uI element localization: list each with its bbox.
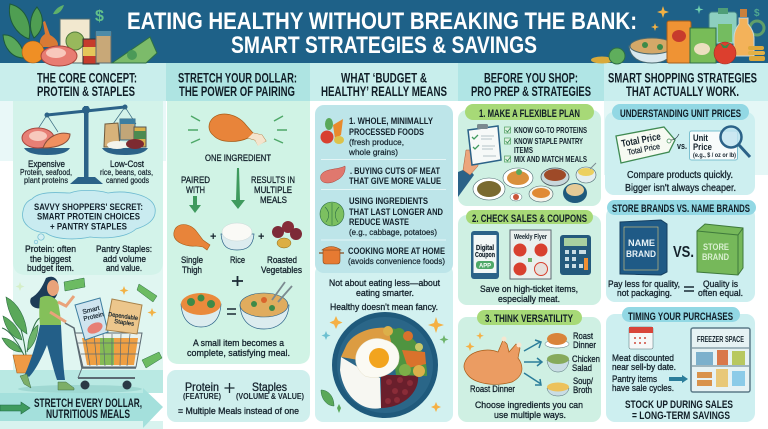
panel: make a flexible plan: 1. MAKE A FLEXIBLE PLAN [479,108,580,120]
panel: what budget and healthy means [315,105,453,273]
icon: unit price card with magnifier [690,126,750,160]
results in multiple meals: RESULTS IN [251,175,295,186]
results in multiple meals: MULTIPLE [254,185,292,196]
panel: timing your purchases [606,307,755,422]
checklist: ITEMS [514,145,533,155]
header illustration: left groceries: $ [95,8,104,25]
scale labels: canned goods [106,176,149,185]
item 3 cabbage [320,196,443,237]
paired with: WITH [186,185,205,196]
icon: unit price card with magnifier: Price [693,142,712,153]
column headings: PRO PREP & STRATEGIES [471,84,591,99]
timing notes: near sell-by date. [612,362,676,373]
protein and staples notes [25,244,152,274]
text: not about eating less [329,278,440,313]
pairing labels: Rice [230,255,245,266]
column headings: THE CORE CONCEPT: [37,70,137,86]
paired with [181,175,210,213]
icon: unit price card with magnifier: Unit [693,133,709,144]
checklist: MIX AND MATCH MEALS [514,154,587,164]
scale labels: rice, beans, oats, [100,168,153,177]
panel: make a flexible plan [458,104,601,206]
timing notes: Pantry items [612,374,657,385]
column headings: WHAT ‘BUDGET & [341,70,427,86]
panel: protein plus staples formula: (FEATURE) [183,392,221,401]
item 4 pot: COOKING MORE AT HOME [348,246,445,257]
text: not about eating less: Not about eating less—about [329,278,440,289]
vs: vs. [677,141,687,152]
item 2 cuts of meat [321,166,441,187]
pairing labels: Roasted [267,255,297,266]
item 1 whole foods: PROCESSED FOODS [349,127,424,138]
item 4 pot: (avoids convenience foods) [348,257,445,266]
pairing labels: Single [181,255,203,266]
title: SMART STRATEGIES & SAVINGS [231,32,537,59]
item 1 whole foods: 1. WHOLE, MINIMALLY [349,116,434,127]
panel: check sales and coupons [458,210,601,305]
icon: store brand box: STORE [703,242,729,253]
panel: understanding unit prices [605,104,755,195]
icon: balance scale [22,104,148,184]
icon: woman shopping with cart: Smart [82,305,100,316]
scale labels: Low-Cost [110,159,144,170]
caption: use multiple ways. [494,410,566,421]
icon: potted plant [2,297,40,373]
column headings: THE POWER OF PAIRING [179,84,295,99]
header illustration: left groceries [3,4,157,66]
timing notes: Meat discounted [612,353,674,364]
icon: clipboard in hand [458,124,501,197]
equation: bowls [181,282,292,329]
arrow: down [231,168,245,209]
caption: Save on high-ticket items, [480,284,578,295]
header illustration: right groceries [591,5,765,64]
item 4 pot [319,246,445,266]
pairing row: + [258,231,264,243]
dish labels: Dinner [573,340,596,351]
timing notes [612,353,676,394]
item 3 cabbage: (e.g., cabbage, potatoes) [349,228,437,237]
protein and staples notes: Protein: often [25,244,76,255]
vs label: VS. [673,244,694,261]
icon: chicken drumstick [188,114,287,146]
item 1 whole foods: (fresh produce, [349,138,404,147]
pairing labels: Thigh [182,265,202,276]
icon: store brand box [697,224,743,275]
icon: weekly flyer: Weekly Flyer [514,232,547,241]
item 3 cabbage: THAT LAST LONGER AND [349,207,443,218]
icon: store brand box: BRAND [702,252,729,263]
text: not about eating less: eating smarter. [356,288,414,299]
dish labels: Broth [573,385,592,396]
caption: A small item becomes a [193,338,285,349]
icons: flying dollar bills and sparkles [15,278,162,368]
icon: name brand box [620,220,667,275]
icon: roast chicken [464,332,522,384]
column headings: HEALTHY’ REALLY MEANS [321,84,447,99]
caption: Choose ingredients you can [475,400,583,411]
icon: phone with digital coupon: Digital [476,245,494,252]
icon: woman shopping with cart: Protein [83,311,105,323]
caption: often equal. [698,288,743,299]
item 1 whole foods [320,116,434,157]
meal dishes [473,163,596,203]
icon: phone with digital coupon: Coupon [475,252,495,259]
item 1 whole foods: whole grains) [348,148,398,157]
caption: especially meat. [498,294,560,305]
pairing row: + [210,231,216,243]
item 3 cabbage: USING INGREDIENTS [349,196,428,207]
panel: protein plus staples formula [167,370,310,422]
title: EATING HEALTHY WITHOUT BREAKING THE BANK: [127,8,637,35]
versatile dishes [545,333,569,396]
icon: rice bowl plate with egg [321,312,448,418]
icon: calendar [629,327,653,349]
dish labels: Salad [572,363,592,374]
item 2 cuts of meat: THAT GIVE MORE VALUE [349,176,441,187]
checklist: KNOW STAPLE PANTRY [514,136,583,146]
column headings: PROTEIN & STAPLES [37,84,135,99]
dish labels [572,331,600,396]
header illustration: right groceries: $ [754,8,760,19]
callout: savvy shoppers' secret: SMART PROTEIN CHOICES [37,212,140,222]
dish labels: Roast [573,331,593,342]
protein and staples notes: budget item. [27,263,74,274]
icon: phone with digital coupon: APP [479,264,491,270]
checklist [504,125,587,164]
icon: price tag [616,127,679,163]
arrows [524,340,542,385]
scale labels: Expensive [28,159,65,170]
panel: stretch your dollar [167,101,310,364]
panel: lower budget and healthy [315,265,453,422]
caption [475,400,583,421]
icon: phone with digital coupon [471,231,499,279]
scale labels: Protein, seafood, [20,168,72,177]
item 2 cuts of meat: . BUYING CUTS OF MEAT [350,166,440,177]
panel: think versatility: 3. THINK VERSATILITY [485,313,573,325]
pairing labels [181,255,302,276]
panel: protein plus staples formula: Staples [252,380,287,394]
icon: name brand box: BRAND [626,249,656,260]
scale labels [20,159,153,185]
dish labels: Chicken [572,354,600,365]
caption [480,284,578,305]
footer text: NUTRITIOUS MEALS [46,407,130,421]
arrow [669,375,688,383]
icon: price tag: Total Price [627,142,661,157]
icon: unit price card with magnifier: (e.g., $ / oz or lb) [693,153,736,159]
column headings: BEFORE YOU SHOP: [484,70,578,86]
label: roast dinner: Roast Dinner [470,384,515,395]
panel: core concept [13,101,163,275]
caption: Quality is [703,279,738,290]
plus sign [232,276,243,286]
icon: name brand box: NAME [628,238,655,249]
column headings: STRETCH YOUR DOLLAR: [178,70,297,86]
label: one ingredient: ONE INGREDIENT [205,153,271,164]
icon: calculator [560,235,591,275]
pairing labels: Vegetables [261,265,302,276]
protein and staples notes: Pantry Staples: [96,244,152,255]
icon: weekly flyer [510,230,551,279]
text: not about eating less: Healthy doesn't mean fancy. [330,302,438,313]
icon: woman shopping with cart: Staples [114,319,134,328]
conclusion: STOCK UP DURING SALES [625,399,733,411]
arrow [0,402,30,414]
item 3 cabbage: REDUCE WASTE [349,217,409,228]
panel: store brands vs name brands [606,200,756,302]
protein and staples notes: and value. [106,263,142,274]
footer text: STRETCH EVERY DOLLAR, [34,396,142,410]
panel: check sales and coupons: 2. CHECK SALES & COUPONS [472,213,587,225]
pairing row [174,221,302,250]
icon: freezer [691,328,750,392]
dish labels: Soup/ [573,376,593,387]
caption: complete, satisfying meal. [187,348,290,359]
caption: Pay less for quality, [608,279,680,290]
column headings [37,70,757,99]
caption: Compare products quickly. [627,170,733,181]
caption [608,279,743,299]
caption: Bigger isn't always cheaper. [625,183,736,194]
callout: savvy shoppers' secret: SAVVY SHOPPERS' SECRET: [34,202,143,213]
footer text [34,396,142,421]
caption: not packaging. [617,288,672,299]
callout: savvy shoppers' secret: + PANTRY STAPLES [50,222,127,232]
conclusion [625,399,733,422]
icon: woman shopping with cart [18,277,142,393]
results in multiple meals: MEALS [260,195,287,206]
protein and staples notes: add volume [103,254,146,265]
title [127,8,637,59]
caption [187,338,290,359]
panel: think versatility [458,310,601,422]
icon: woman shopping with cart: Dependable [108,312,139,322]
panel: protein plus staples formula: Protein [185,380,219,394]
checklist: KNOW GO-TO PROTEINS [514,125,587,135]
timing notes: have sale cycles. [612,383,674,394]
footer arrow band [0,370,163,429]
conclusion: = LONG-TERM SAVINGS [632,410,730,422]
panel: protein plus staples formula: (VOLUME & VALUE) [236,392,304,401]
caption [625,170,736,194]
title banner [0,0,768,63]
protein and staples notes: the biggest [30,254,71,265]
results in multiple meals [251,175,295,206]
icon: freezer: FREEZER SPACE [697,335,744,344]
paired with: PAIRED [181,175,210,186]
callout: savvy shoppers' secret [23,190,155,244]
scale labels: plant proteins [24,176,68,185]
icon: price tag: Total Price [620,131,662,150]
dividers [321,160,446,240]
panel: protein plus staples formula: = Multiple Meals instead of one [178,406,299,417]
